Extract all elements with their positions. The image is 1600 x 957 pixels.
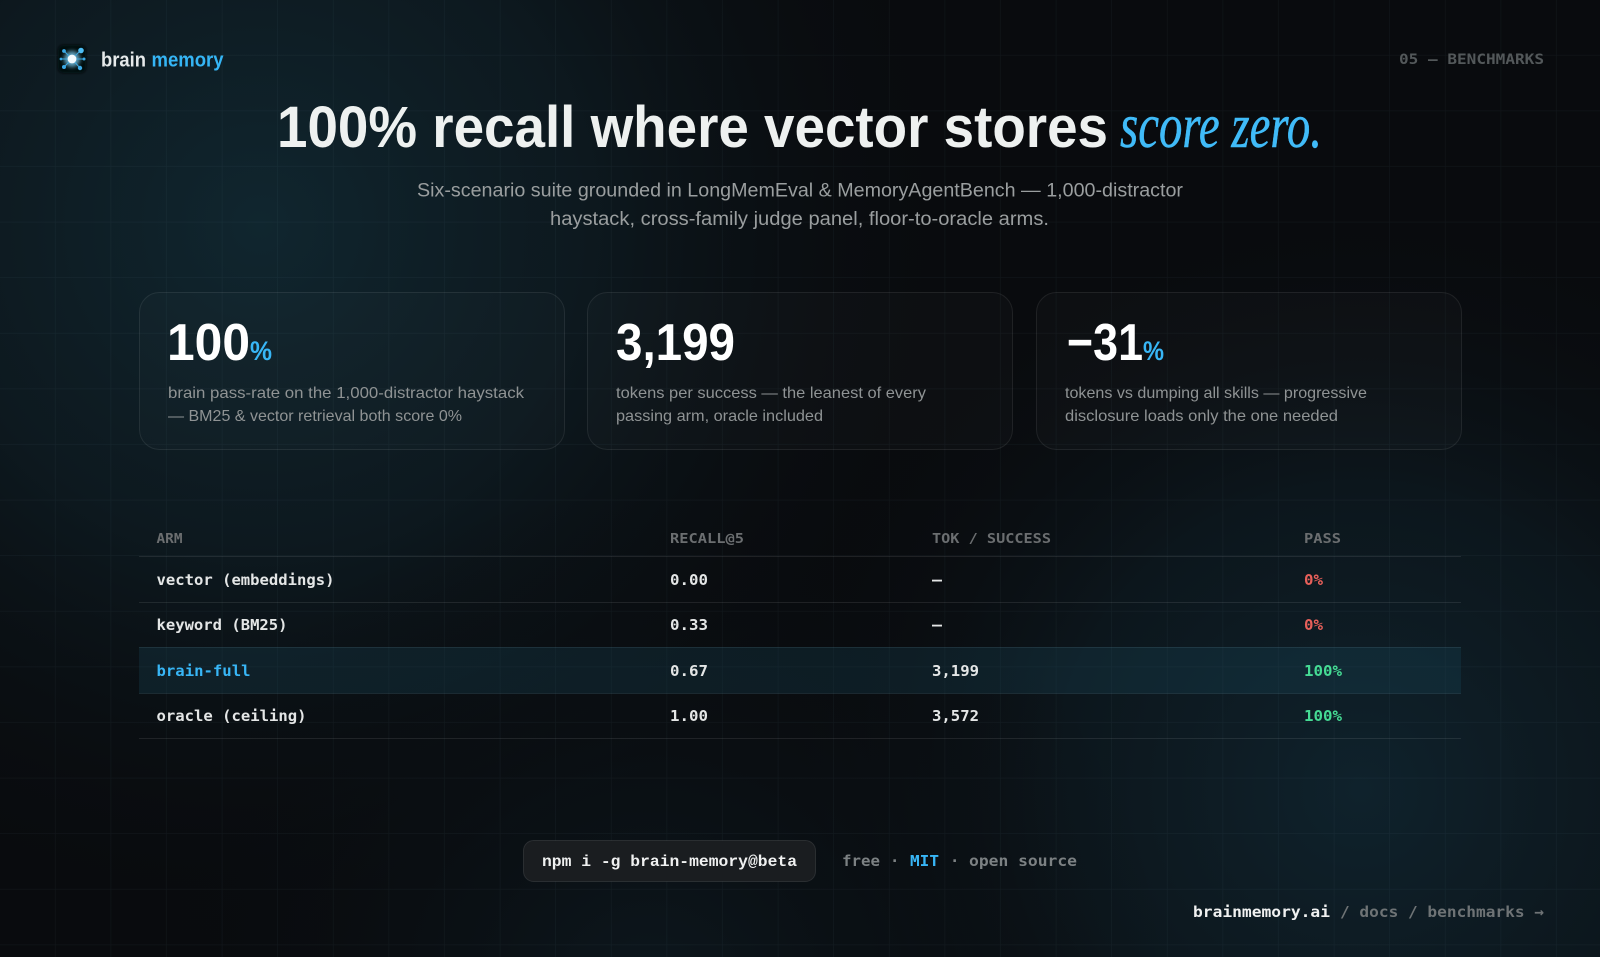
panel: stat 3,199: passing arm, oracle included (616, 408, 823, 425)
panel: stat 100%: — BM25 & vector retrieval both score 0% (168, 408, 462, 425)
row: oracle: 100% (1304, 707, 1343, 725)
row: brain-full highlighted (139, 647, 1461, 694)
subtitle: Six-scenario suite grounded in LongMemEval & MemoryAgentBench — 1,000-distractor (417, 180, 1184, 202)
install command (524, 840, 816, 882)
panel: stat 3,199: 3,199 (616, 314, 735, 372)
panel: stat 3,199 (588, 292, 1012, 450)
panel: stat -31%: tokens vs dumping all skills — progressive (1065, 385, 1367, 402)
row: brain-full highlighted: 100% (1304, 662, 1343, 680)
panel: stat 100%: 100 (167, 314, 250, 372)
license note (842, 852, 1077, 870)
row: keyword: 0.33 (670, 616, 708, 634)
row: oracle: 3,572 (932, 707, 979, 725)
row: vector: 0% (1304, 571, 1324, 589)
row: brain-full highlighted: 3,199 (932, 662, 979, 680)
table header: PASS (1304, 531, 1341, 547)
license note: · (890, 852, 899, 870)
brand name: brain (101, 50, 146, 72)
table (139, 531, 1461, 738)
table header: RECALL@5 (670, 531, 744, 547)
table header: TOK / SUCCESS (932, 531, 1051, 547)
panel: stat 100%: brain pass-rate on the 1,000-distractor haystack (168, 385, 525, 402)
logo: memory (152, 50, 224, 72)
subtitle: haystack, cross-family judge panel, floor-to-oracle arms. (550, 209, 1049, 230)
row: keyword: — (932, 616, 943, 634)
row: keyword: keyword (BM25) (156, 616, 288, 634)
footer link: / docs / benchmarks → (1340, 903, 1544, 921)
row: vector: — (932, 571, 943, 589)
row: oracle: oracle (ceiling) (156, 707, 306, 725)
row: brain-full highlighted: 0.67 (670, 662, 708, 680)
title: score zero. (1120, 90, 1322, 161)
panel: stat 3,199: tokens per success — the leanest of every (616, 385, 926, 402)
panel: stat 100% (140, 292, 564, 450)
footer link (1193, 903, 1544, 921)
row: keyword (156, 616, 1324, 634)
row: oracle: 1.00 (670, 707, 708, 725)
subtitle (417, 180, 1184, 230)
install command: npm i -g brain-memory@beta (542, 853, 797, 871)
logo (58, 45, 224, 73)
license note: open source (969, 852, 1077, 870)
section label: 05 — BENCHMARKS (1399, 52, 1544, 68)
icon: brain network (58, 45, 86, 73)
license note: MIT (910, 852, 939, 870)
panel: stat 100%: % (250, 336, 272, 366)
panel: stat -31%: disclosure loads only the one needed (1065, 408, 1338, 425)
row: vector: 0.00 (670, 571, 708, 589)
panel: stat -31%: % (1143, 336, 1164, 366)
row: keyword: 0% (1304, 616, 1324, 634)
panel: stat -31% (1036, 292, 1462, 450)
row: vector: vector (embeddings) (156, 571, 334, 589)
license note: · (950, 852, 959, 870)
panel: stat -31%: −31 (1067, 314, 1143, 372)
row: vector (156, 571, 1324, 589)
license note: free (842, 852, 880, 870)
table header (156, 531, 1341, 547)
title: 100% recall where vector stores (277, 95, 1108, 160)
row: oracle (156, 707, 1343, 725)
footer link: brainmemory.ai (1193, 903, 1330, 921)
row: brain-full highlighted: brain-full (156, 662, 250, 680)
table header: ARM (156, 531, 182, 547)
